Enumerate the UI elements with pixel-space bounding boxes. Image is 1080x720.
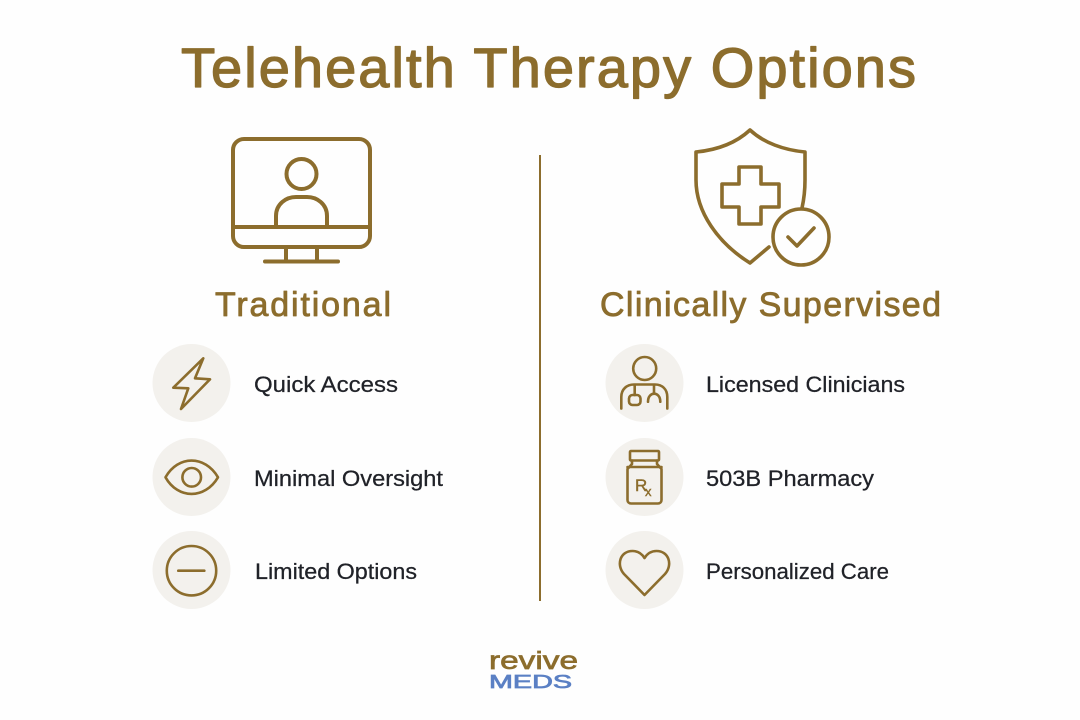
center divider [539,155,541,601]
icon: eye [166,461,218,494]
icon: heart [620,551,669,595]
title: Telehealth Therapy Options [181,36,916,99]
heading: traditional: Traditional [215,286,391,324]
panel: traditional [152,139,443,609]
item: personalized care [606,531,889,609]
icon: lightning bolt [173,358,210,409]
icon: shield with cross and check [696,130,829,265]
item: 503b pharmacy [606,438,874,516]
heading: clinically supervised: Clinically Supervised [600,286,941,324]
logo: revive meds [489,647,578,692]
logo: revive meds: MEDS [489,672,572,692]
item: licensed clinicians: Licensed Clinicians [706,372,905,397]
item: minimal oversight: Minimal Oversight [254,466,443,491]
item: minimal oversight [152,438,443,516]
item: 503b pharmacy: R [635,476,647,495]
logo: revive meds: revive [489,647,578,675]
item: limited options [152,531,417,609]
item: quick access [152,344,398,422]
icon: minus circle [167,546,216,595]
icon: monitor with person [233,139,370,262]
item: quick access: Quick Access [254,372,398,397]
icon: doctor [621,357,667,408]
item: 503b pharmacy: 503B Pharmacy [706,466,874,491]
item: limited options: Limited Options [255,559,417,584]
item: 503b pharmacy: x [645,484,652,499]
item: licensed clinicians [606,344,905,422]
panel: clinically supervised [600,130,941,609]
item: personalized care: Personalized Care [706,559,889,584]
icon: prescription bottle [628,451,662,504]
